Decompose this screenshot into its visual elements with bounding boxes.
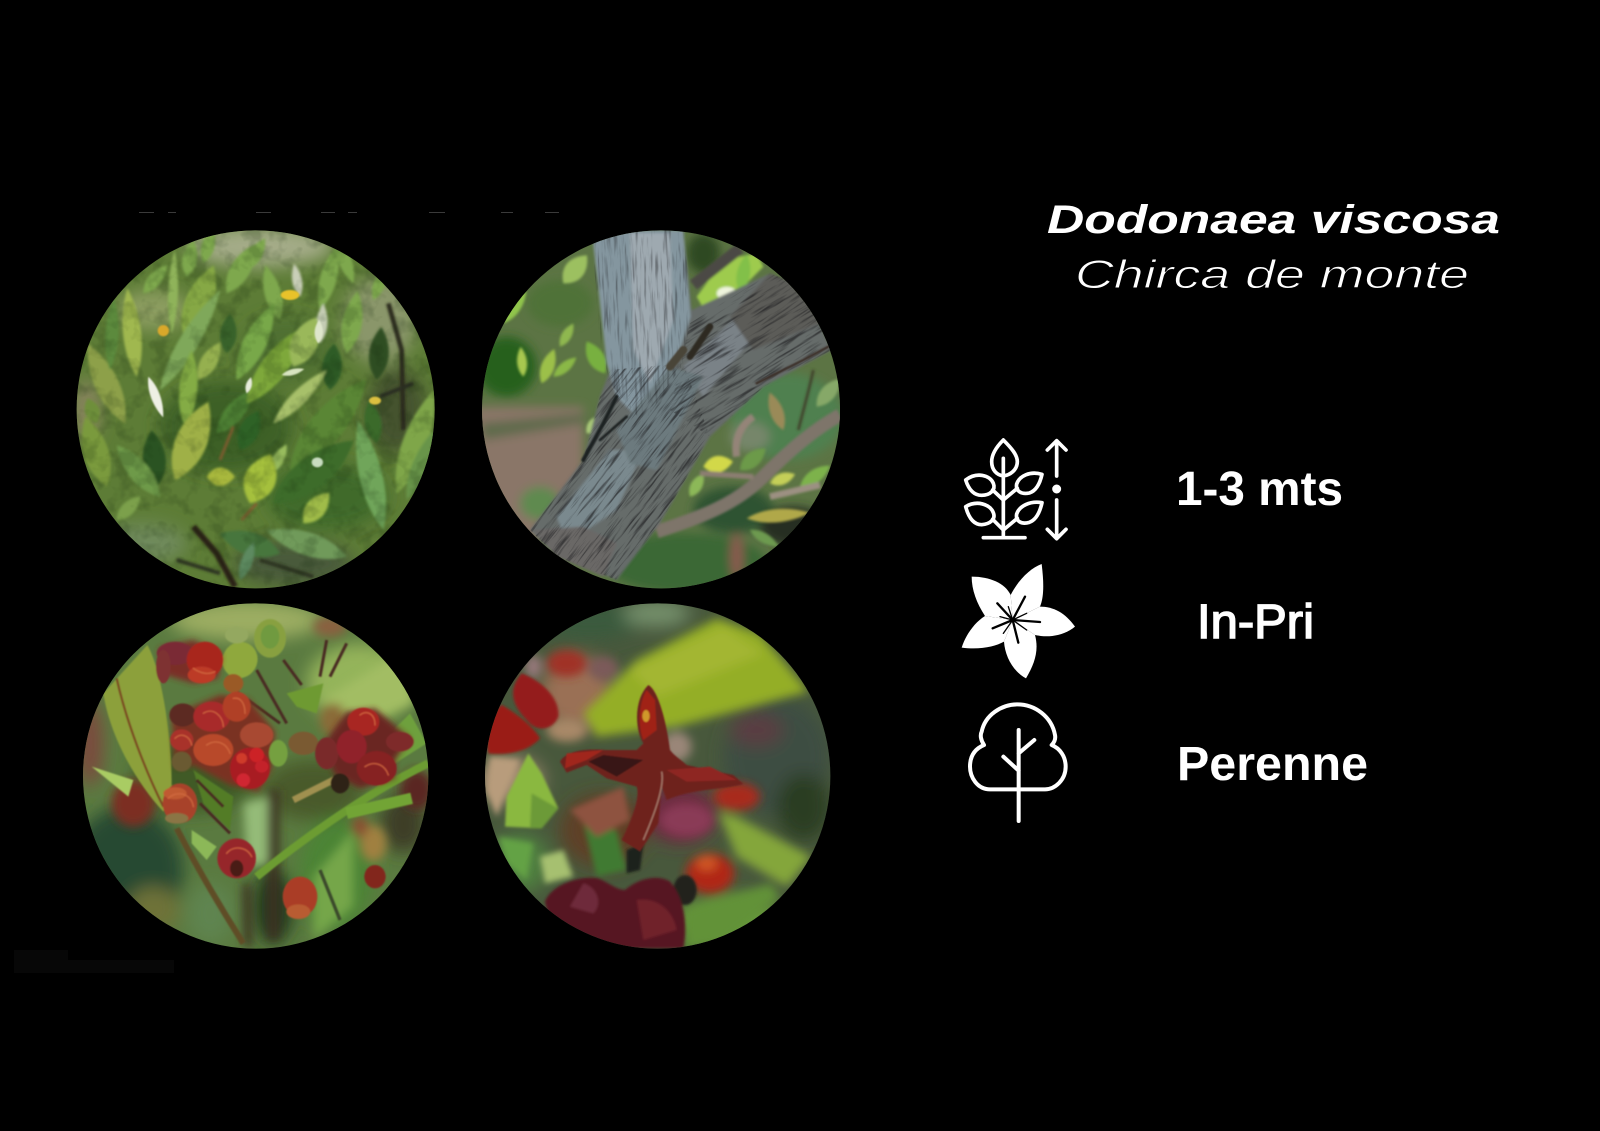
faint artifact: dashes above the photos <box>139 212 559 213</box>
label: flowering season: In-Pri <box>1197 596 1314 649</box>
photo: trunk <box>83 230 840 948</box>
photo: red capsule close-up <box>485 603 830 949</box>
icon: flower <box>962 564 1075 678</box>
photo: leaves <box>60 210 460 610</box>
photo: red fruit cluster <box>83 603 428 949</box>
label: height: 1-3 mts <box>1176 463 1343 516</box>
subtitle: common name: Chirca de monte <box>1075 253 1469 297</box>
label: foliage type: Perenne <box>1177 738 1368 791</box>
title: scientific name: Dodonaea viscosa <box>1047 198 1500 242</box>
icon: tree <box>970 704 1066 821</box>
icon: plant height <box>966 440 1066 539</box>
faint artifact: dark patch bottom left <box>14 950 174 973</box>
bark texture <box>485 230 830 948</box>
cluster underlays <box>158 640 410 792</box>
